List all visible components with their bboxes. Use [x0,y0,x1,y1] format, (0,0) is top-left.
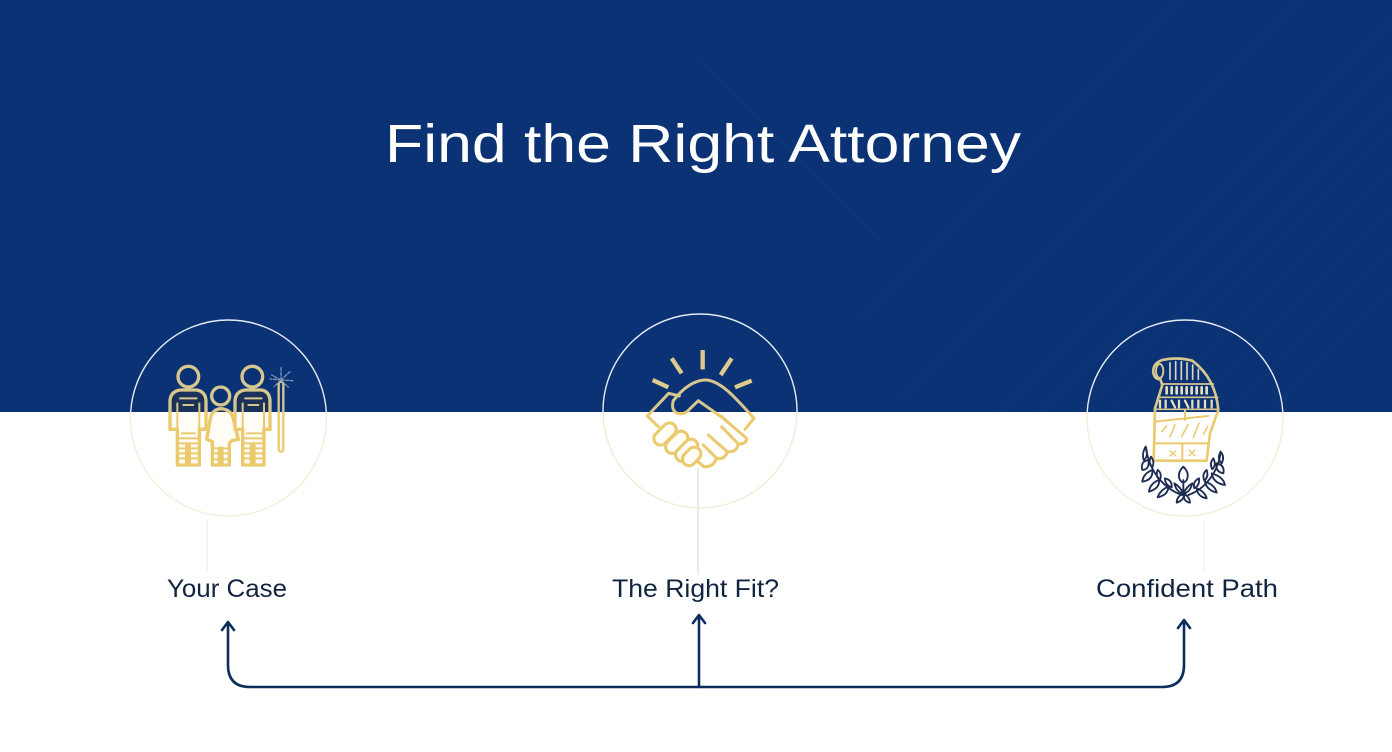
circle outline [130,320,326,516]
navy header panel [0,0,1392,412]
circle outline [1087,320,1283,516]
step 1: your case [130,320,326,603]
icon: handshake [647,350,754,468]
laurel [1142,447,1225,503]
label: The Right Fit? [612,575,779,603]
connector line [1203,522,1205,572]
arrow: branching connector [222,615,1190,687]
title: Find the Right Attorney [385,114,1021,174]
step 3: confident path [1087,320,1283,603]
icon: family [170,366,293,465]
icon: harp and laurel [1142,358,1225,503]
connector line [206,520,208,572]
label: Your Case [167,575,287,603]
step 2: the right fit [603,314,797,603]
connector line [697,468,699,575]
label: Confident Path [1096,575,1278,603]
circle outline [603,314,797,508]
